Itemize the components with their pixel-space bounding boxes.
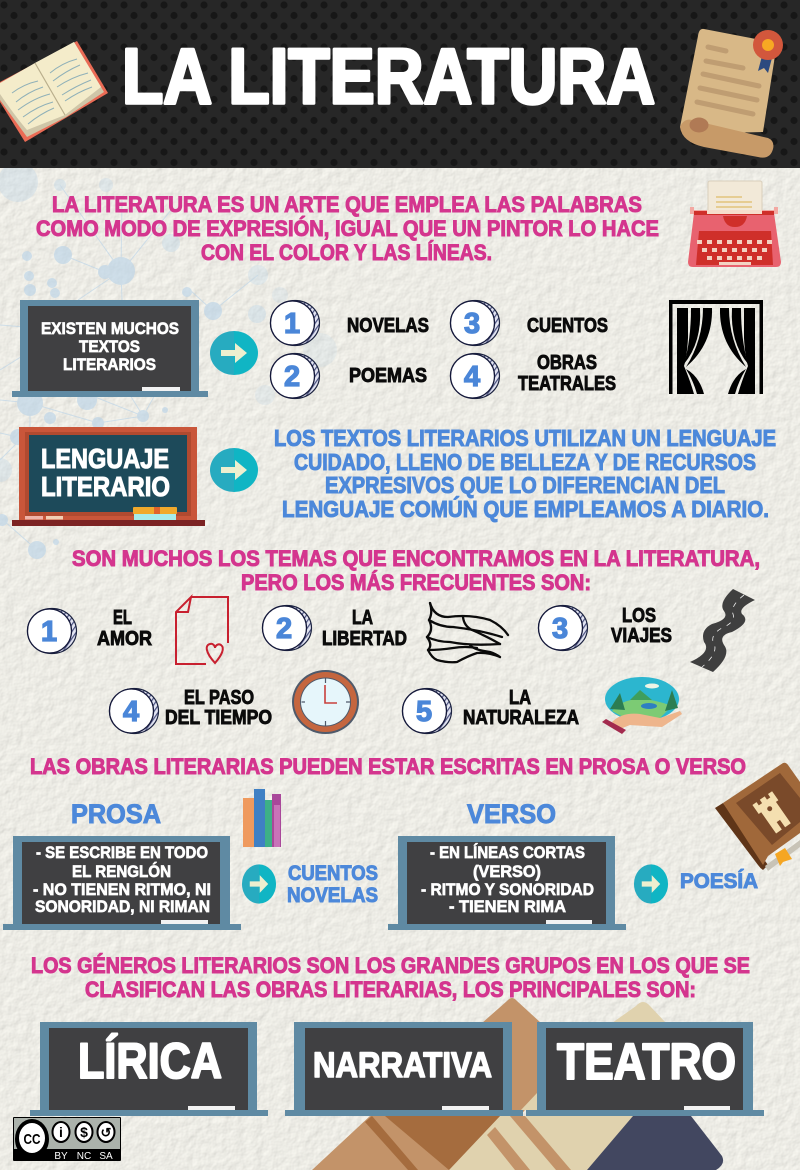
chalkboard: prosa: - NO TIENEN RITMO, NI	[33, 880, 211, 899]
number 4	[110, 688, 158, 734]
chalkboard: lírica	[30, 1022, 268, 1116]
icon: theatre curtain	[669, 300, 763, 394]
badge: creative commons: ↺	[101, 1125, 112, 1140]
number 2: 2	[284, 361, 300, 393]
arrow	[634, 864, 668, 904]
badge: creative commons: BY	[54, 1151, 68, 1162]
label: los viajes	[611, 605, 672, 647]
icon: scroll with seal	[680, 29, 783, 158]
label: la libertad: LA	[352, 607, 373, 629]
label: la naturaleza	[463, 687, 579, 729]
chalkboard: existen muchos textos literarios: EXISTEN MUCHOS	[41, 319, 179, 338]
number 3	[538, 606, 588, 650]
label: la naturaleza: NATURALEZA	[463, 707, 579, 729]
label: cuentos: CUENTOS	[527, 315, 608, 337]
chalkboard: narrativa: NARRATIVA	[313, 1046, 492, 1085]
label: los viajes: VIAJES	[611, 625, 672, 647]
number 5: 5	[416, 696, 432, 728]
number 2	[270, 354, 320, 398]
arrow	[242, 864, 276, 904]
chalkboard: lenguaje literario	[12, 427, 205, 526]
number 3: 3	[552, 613, 568, 645]
label: el amor	[97, 607, 152, 650]
chalkboard: verso	[388, 836, 626, 930]
heading: temas: SON MUCHOS LOS TEMAS QUE ENCONTRAMOS EN LA LITERATURA,	[72, 546, 760, 571]
chalkboard: verso: (VERSO)	[473, 862, 541, 881]
heading: temas: PERO LOS MÁS FRECUENTES SON:	[241, 570, 591, 595]
number 4	[450, 354, 500, 398]
badge: creative commons: $	[80, 1124, 88, 1140]
chalkboard: existen muchos textos literarios: TEXTOS	[79, 337, 140, 356]
number 3: 3	[464, 308, 480, 340]
icon: road	[690, 589, 755, 672]
number 3	[450, 300, 500, 346]
number 2	[262, 606, 312, 650]
intro text: COMO MODO DE EXPRESIÓN, IGUAL QUE UN PINTOR LO HACE	[36, 216, 659, 241]
chalkboard: verso: - RITMO Y SONORIDAD	[421, 880, 594, 899]
heading: géneros literarios: CLASIFICAN LAS OBRAS LITERARIAS, LOS PRINCIPALES SON:	[85, 977, 696, 1002]
label: el amor: EL	[113, 607, 132, 629]
label: obras teatrales: TEATRALES	[518, 373, 616, 395]
label: cuentos novelas	[287, 862, 378, 907]
number 4: 4	[464, 361, 480, 393]
badge: creative commons: NC	[77, 1151, 91, 1162]
header band	[0, 0, 800, 168]
chalkboard: lenguaje literario: LITERARIO	[41, 471, 170, 502]
chalkboard: narrativa	[285, 1022, 523, 1116]
badge: creative commons: CC	[24, 1131, 41, 1148]
number 5	[402, 688, 452, 734]
chalkboard: lírica: LÍRICA	[78, 1033, 222, 1089]
heading: prosa: PROSA	[71, 799, 161, 829]
label: los viajes: LOS	[622, 605, 656, 627]
chalkboard: existen muchos textos literarios: LITERARIOS	[63, 355, 156, 374]
label: la libertad: LIBERTAD	[322, 628, 407, 650]
chalkboard: prosa: - SE ESCRIBE EN TODO	[36, 843, 208, 862]
number 1: 1	[41, 616, 57, 648]
arrow	[210, 448, 258, 492]
label: cuentos novelas: CUENTOS	[288, 862, 378, 885]
label: obras teatrales	[518, 352, 616, 395]
label: cuentos novelas: NOVELAS	[287, 884, 378, 907]
heading: verso: VERSO	[467, 799, 556, 829]
title: LA LITERATURA	[122, 32, 655, 120]
icon: typewriter	[688, 181, 781, 267]
chalkboard: verso: - TIENEN RIMA	[449, 897, 566, 916]
badge: creative commons: SA	[99, 1151, 113, 1162]
decoration: stack of books	[312, 998, 723, 1170]
chalkboard: existen muchos textos literarios	[12, 300, 208, 397]
heading: géneros literarios	[31, 953, 750, 1002]
chalkboard: prosa: SONORIDAD, NI RIMAN	[35, 897, 210, 916]
label: poemas: POEMAS	[349, 365, 427, 387]
icon: brown book	[715, 763, 800, 871]
chalkboard: lenguaje literario: LENGUAJE	[41, 443, 169, 474]
icon: nature in hand	[602, 677, 682, 734]
label: poesía: POESÍA	[680, 870, 758, 893]
number 4: 4	[123, 696, 139, 728]
icon: page with heart	[176, 597, 228, 664]
badge: creative commons: i	[59, 1124, 63, 1140]
icon: open book	[0, 41, 108, 142]
number 1: 1	[284, 308, 300, 340]
chalkboard: verso: - EN LÍNEAS CORTAS	[430, 843, 585, 862]
arrow	[210, 331, 258, 375]
intro text	[36, 192, 659, 265]
label: obras teatrales: OBRAS	[537, 352, 597, 374]
heading: prosa o verso: LAS OBRAS LITERARIAS PUEDEN ESTAR ESCRITAS EN PROSA O VERSO	[30, 754, 746, 779]
number 2: 2	[276, 613, 292, 645]
description: lenguaje literario	[274, 425, 776, 522]
label: la libertad	[322, 607, 407, 650]
icon: clock	[292, 670, 359, 734]
label: el amor: AMOR	[97, 628, 152, 650]
intro text: CON EL COLOR Y LAS LÍNEAS.	[201, 240, 492, 265]
heading: temas	[72, 546, 760, 595]
label: el paso del tiempo: DEL TIEMPO	[165, 707, 272, 729]
chalkboard: prosa	[3, 836, 241, 930]
label: el paso del tiempo	[165, 687, 272, 729]
label: el paso del tiempo: EL PASO	[184, 687, 254, 709]
description: lenguaje literario: EXPRESIVOS QUE LO DIFERENCIAN DEL	[325, 472, 725, 498]
number 1	[28, 608, 76, 654]
intro text: LA LITERATURA ES UN ARTE QUE EMPLEA LAS PALABRAS	[52, 192, 642, 217]
background network decoration	[0, 162, 337, 559]
icon: books	[243, 789, 281, 847]
number 1	[270, 300, 320, 346]
label: novelas: NOVELAS	[347, 315, 429, 337]
icon: wings	[427, 603, 508, 662]
chalkboard: teatro: TEATRO	[557, 1033, 736, 1090]
chalkboard: prosa: EL RENGLÓN	[72, 862, 171, 881]
chalkboard: teatro	[526, 1022, 764, 1116]
badge: creative commons	[13, 1117, 121, 1162]
label: la naturaleza: LA	[509, 687, 531, 709]
